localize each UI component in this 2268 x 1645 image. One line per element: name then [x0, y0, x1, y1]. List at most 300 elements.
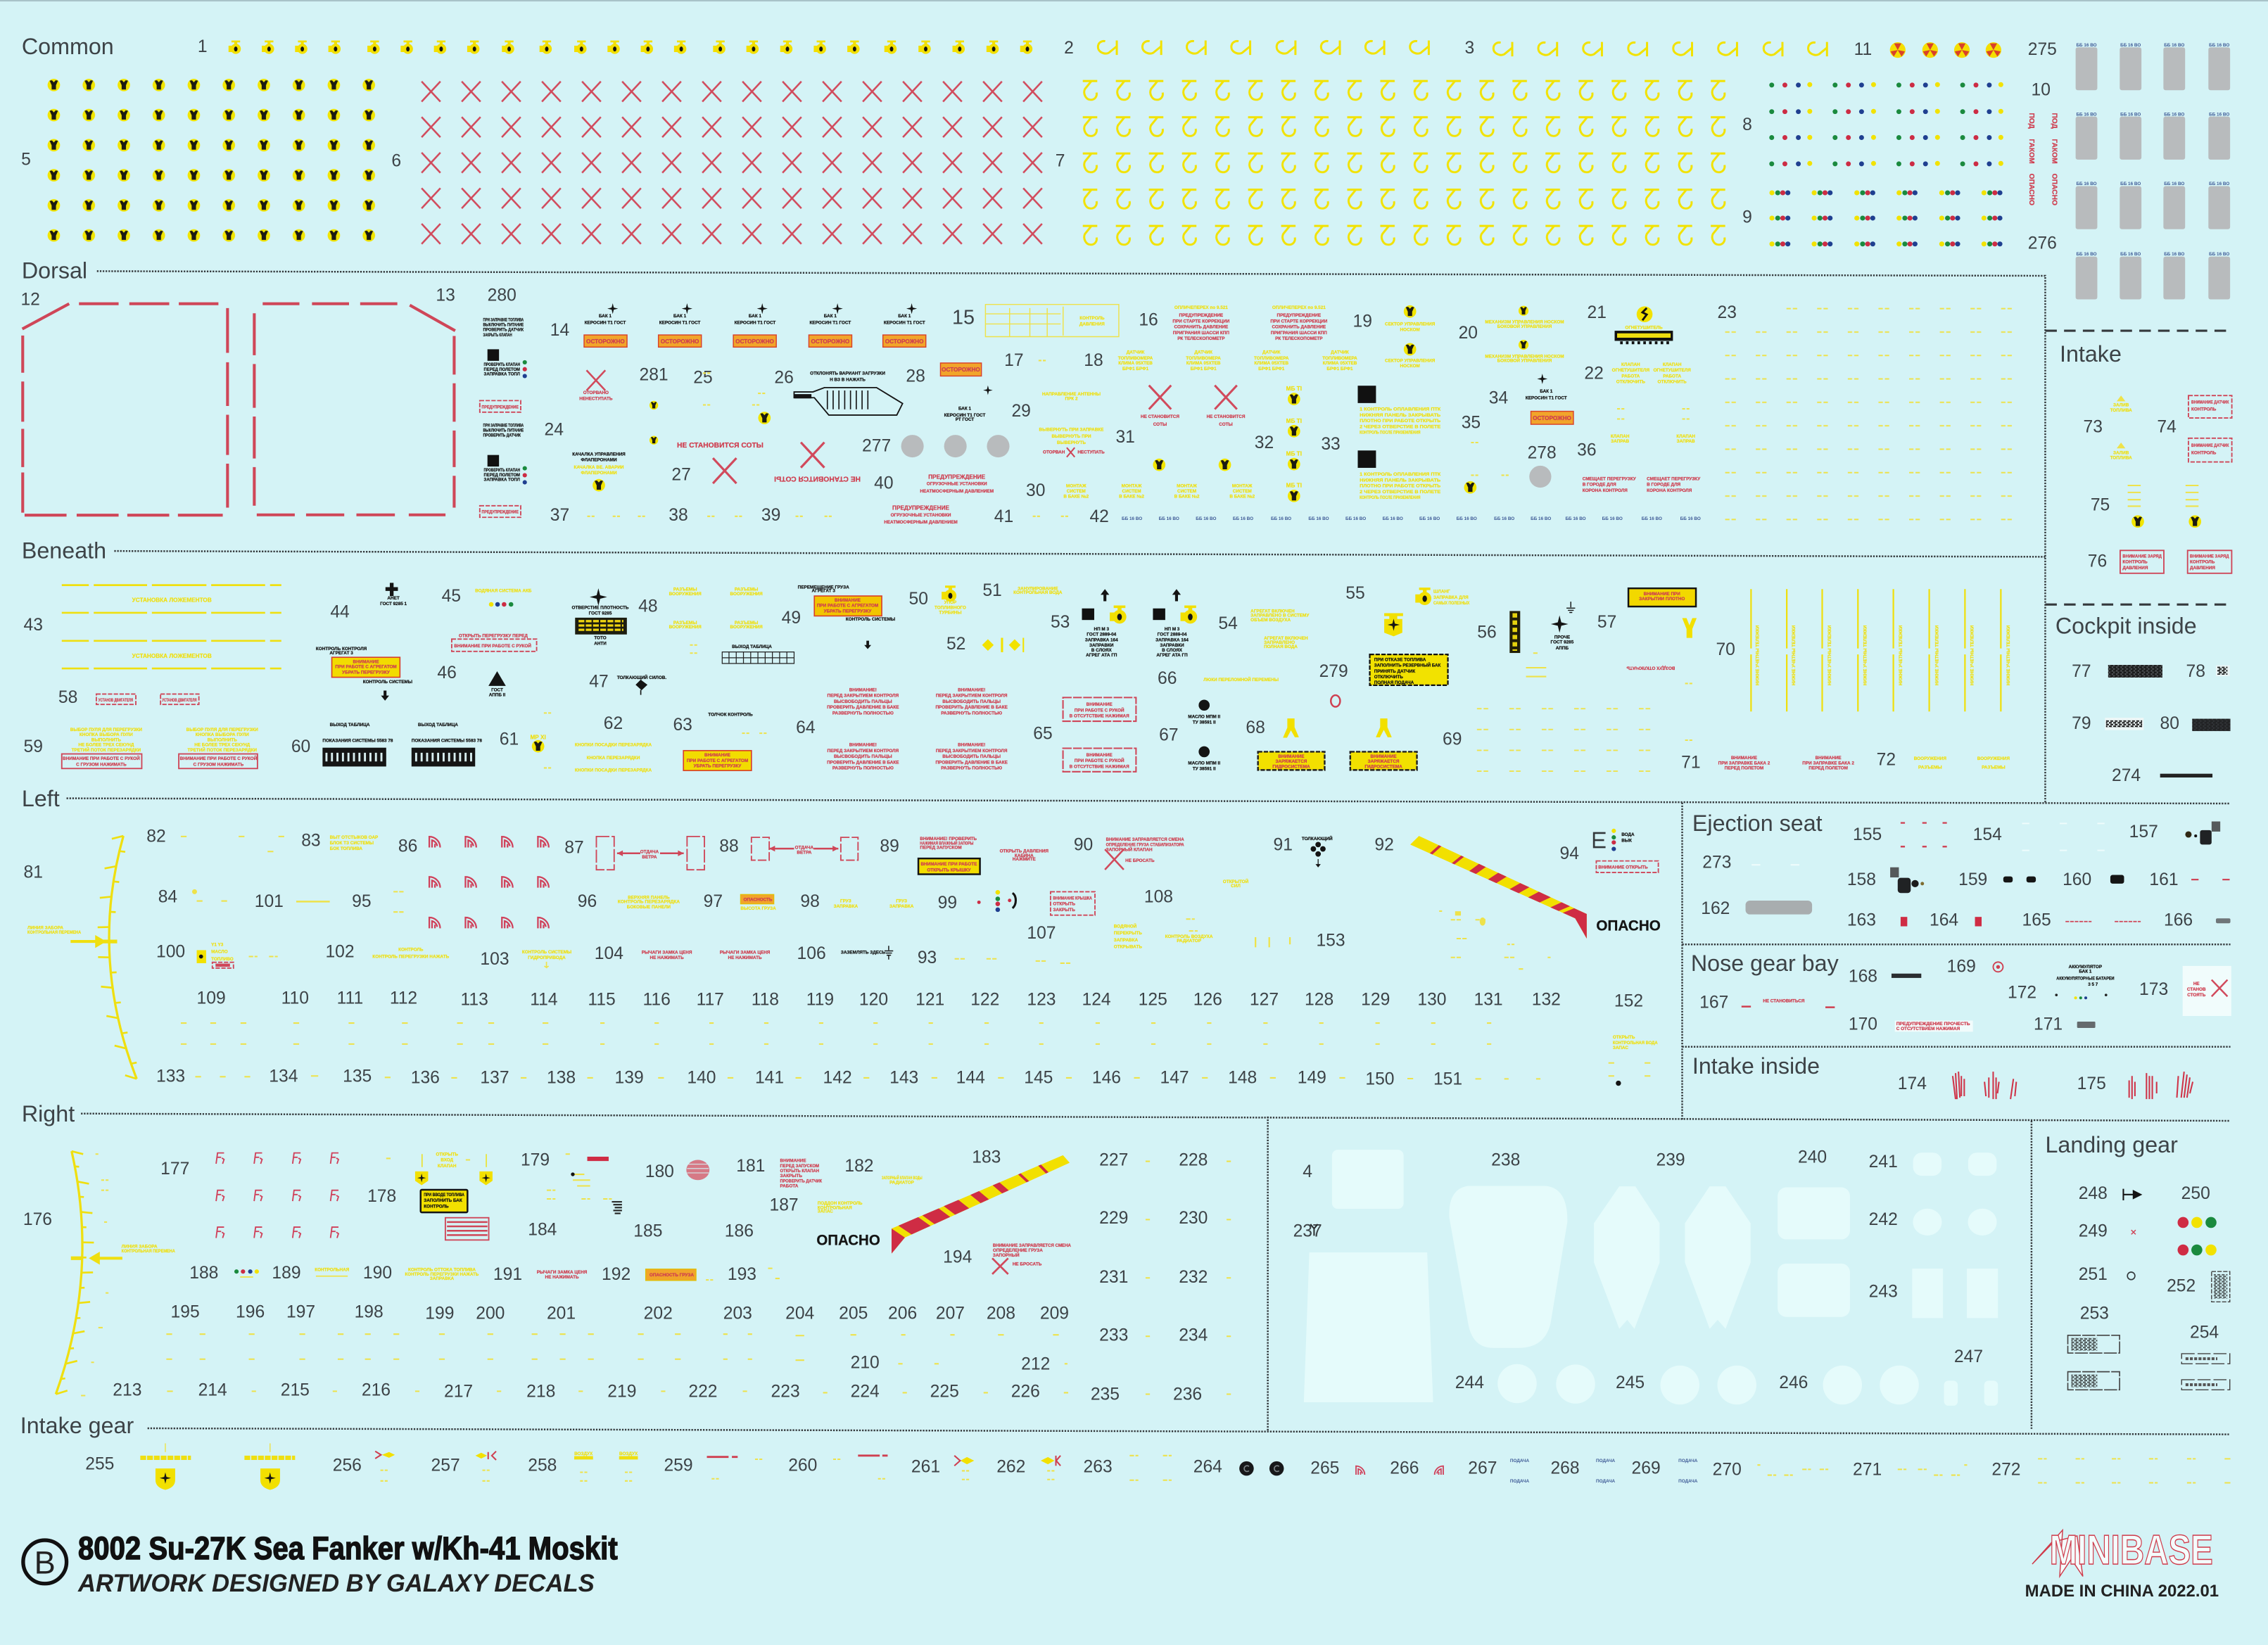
item 152: yellow text and black dot: ЗАПАС	[1613, 1046, 1628, 1050]
item numbers: landing gear	[2079, 1184, 2219, 1342]
item 59: yellow text with red boxes: С ГРУЗОМ НАЖИМАТЬ	[194, 762, 244, 767]
item 55: valves with cross and yellow panel: ЗАПРАВКА ДЛЯ	[1433, 595, 1469, 600]
item 83: yellow text: ВЫТ ОТСТЫКОВ ОАР	[330, 835, 379, 840]
item numbers: nose gear bay: 170	[1849, 1015, 1877, 1034]
item numbers: right: 196	[236, 1303, 265, 1322]
item 31: crosses and do not step text	[1141, 386, 1246, 471]
item 83: yellow text	[330, 835, 379, 851]
item numbers: common: 3	[1465, 39, 1474, 58]
item numbers: beneath: 65	[1033, 724, 1053, 743]
item 13: red dashed panel outline	[254, 304, 455, 515]
item 194: warning text and cross	[992, 1243, 1071, 1274]
item numbers: left: 140	[687, 1069, 716, 1088]
yellow weapons connectors text: РАЗЪЕМЫ	[673, 588, 697, 592]
item 94: E mark, dots and red box: ВОДА	[1621, 832, 1635, 837]
item 55: valves with cross and yellow panel: САМЫХ ПОЛЕЗНЫХ	[1433, 601, 1470, 606]
item 20: Y markers and text: БОКОВОЙ УПРАВЛЕНИЯ	[1497, 323, 1552, 329]
item 170: white strip with red text: С ОТСУТСТВИЕМ НАЖИМАЯ	[1896, 1027, 1960, 1031]
item 18: yellow fuel gauge text: КЛИМА 05ХТЕВ	[1186, 361, 1221, 366]
yellow weapons connectors text: РАЗЪЕМЫ	[735, 621, 758, 625]
item numbers: left: 143	[889, 1069, 918, 1088]
panel: cockpit inside	[2055, 613, 2231, 785]
item numbers: left: 111	[337, 989, 363, 1008]
item numbers: common	[21, 37, 2057, 253]
item numbers: ejection seat: 154	[1973, 825, 2002, 844]
item numbers: dorsal: 35	[1462, 413, 1481, 432]
item numbers: right: 232	[1179, 1268, 1208, 1287]
item 14: fuel placards with cross and orange label: БАК 1	[599, 314, 612, 319]
footer: product title: 8002 Su-27K Sea Fanker w/Kh-41 Moskit	[78, 1530, 618, 1566]
icon grid 5: yellow Y markers	[37, 70, 386, 250]
item 172: black text and dots: АККУМУЛЯТОР	[2069, 965, 2103, 970]
item 36: yellow and red text	[1583, 409, 1701, 493]
item 33: black squares with yellow text blocks: КОНТРОЛЬ ПОСЛЕ ПРИЗЕМЛЕНИЯ	[1360, 431, 1421, 436]
item numbers: nose gear bay: 167	[1699, 993, 1728, 1012]
item 54: yellow text	[1250, 609, 1310, 649]
item 102-104: text stencils: РЫЧАГИ ЗАМКА ЦЕНЯ	[720, 951, 771, 955]
item 81: yellow curved ruler with arrow	[27, 836, 137, 1079]
item numbers: left: 149	[1298, 1069, 1326, 1088]
item 32: MB-TI Y markers: МБ ТІ	[1286, 450, 1302, 457]
item 76: red lined boxes: ВНИМАНИЕ ЗАРЯД	[2190, 554, 2229, 559]
item 63: yellow warning label: ВНИМАНИЕ	[704, 753, 730, 758]
item numbers: dorsal: 277	[862, 436, 891, 455]
heading: Cockpit inside: Cockpit inside	[2055, 613, 2197, 638]
item numbers: nose gear bay: 172	[2008, 983, 2036, 1002]
item numbers: left: 142	[823, 1069, 852, 1088]
item 10: vertical red warning text: ГАКОМ	[2051, 139, 2058, 164]
item 44: cross, yellow warning label and arrow: ВНИМАНИЕ	[353, 659, 379, 664]
item 42: blue stencil row: ББ 16 ВО	[1159, 516, 1179, 521]
item numbers: intake: 73	[2084, 418, 2103, 437]
item numbers: left: 99	[938, 894, 957, 913]
item 53: arrows, squares, valves and black text: АГРЕГ АТА ГП	[1156, 653, 1188, 658]
item numbers: dorsal: 27	[671, 465, 691, 484]
item numbers: cockpit inside: 79	[2072, 714, 2091, 733]
item 67: oil filler markers: МАСЛО МПМ II	[1188, 761, 1220, 766]
item numbers: intake gear: 270	[1713, 1461, 1742, 1480]
item 49: warning label: КОНТРОЛЬ СИСТЕМЫ	[846, 617, 895, 622]
item 30: yellow installation text: В БАКЕ №2	[1063, 494, 1089, 499]
item 54: yellow text: ПОЛНАЯ ВОДА	[1264, 644, 1298, 649]
item 100: valve with small labels: ТОПЛИВО	[211, 957, 234, 962]
panel: ejection seat	[1692, 811, 2231, 930]
item numbers: right: 216	[362, 1381, 391, 1400]
item 18: yellow fuel gauge text: ДАТЧИК	[1331, 350, 1349, 355]
item 44: cross, yellow warning label and arrow: УБРАТЬ ПЕРЕГРУЗКУ	[342, 670, 391, 675]
item 23: yellow stencil grid	[1715, 297, 2022, 531]
item 62: yellow text: КНОПКА ПЕРЕЗАРЯДКИ	[587, 756, 640, 761]
item 36: yellow and red text: КОРОНА КОНТРОЛЯ	[1647, 488, 1692, 493]
item 42: blue stencil row: ББ 16 ВО	[1642, 516, 1662, 521]
item 16: red warning blocks: СОХРАНИТЬ ДАВЛЕНИЕ	[1272, 325, 1326, 330]
item 59: yellow text with red boxes: С ГРУЗОМ НАЖИМАТЬ	[76, 762, 127, 767]
item 20: Y markers and text	[1485, 306, 1564, 363]
item 65: red warning boxes: В ОТСУТСТВИЕ НАЖИМАЯ	[1070, 764, 1129, 769]
item 26: black line drawing of panel: Н ВЗ В НАЖАТЬ	[830, 378, 866, 383]
item 42: blue stencil row: ББ 16 ВО	[1565, 516, 1586, 521]
item numbers: intake gear: 259	[664, 1456, 693, 1475]
item numbers: dorsal: 16	[1139, 310, 1158, 329]
heading: Nose gear bay: Nose gear bay	[1691, 951, 1839, 976]
item numbers: common: 275	[2028, 40, 2057, 59]
item 254: grey data plates	[2181, 1354, 2230, 1390]
item 55: valves with cross and yellow panel: ПРИ ОТКАЗЕ ТОПЛИВА	[1374, 657, 1426, 662]
item 74: red dashed boxes: ВНИМАНИЕ ДАТЧИК	[2191, 443, 2229, 448]
item numbers: right: 204	[785, 1304, 814, 1323]
item 76: red lined boxes: КОНТРОЛЬ	[2190, 560, 2215, 565]
item 30: yellow installation text: В БАКЕ №2	[1229, 494, 1255, 499]
items 163-166: red and grey decals	[1901, 917, 2231, 927]
item 27: do not step marking: НЕ СТАНОВИТСЯ СОТЫ	[677, 442, 764, 450]
item numbers: left: 147	[1160, 1069, 1189, 1088]
item numbers: ejection seat: 157	[2129, 823, 2158, 841]
item 172: black text and dots	[2055, 965, 2115, 999]
item numbers: dorsal: 28	[906, 367, 925, 386]
item numbers: dorsal: 37	[550, 506, 569, 525]
item 55: valves with cross and yellow panel: ПРИНЯТЬ ДАТЧИК	[1374, 669, 1415, 674]
item 49: warning label: АГРЕГАТ 3	[812, 589, 835, 594]
item numbers: left: 148	[1228, 1069, 1257, 1088]
item numbers: right: 226	[1011, 1383, 1040, 1402]
item numbers: beneath: 51	[982, 581, 1002, 600]
item numbers: left: 119	[806, 991, 834, 1010]
item 40: warning text	[920, 474, 994, 494]
item 20: Y markers and text: МЕХАНИЗМ УПРАВЛЕНИЯ НОСКОМ	[1485, 355, 1564, 360]
item 102-104: text stencils	[372, 947, 771, 967]
item 280: black placards stack: ВЫКЛЮЧИТЬ ПИТАНИЕ	[483, 323, 524, 328]
item numbers: left: 96	[578, 892, 597, 911]
item 36: yellow and red text: КЛАПАН	[1676, 434, 1695, 439]
item 30: yellow installation text: МОНТАЖ	[1122, 484, 1142, 489]
item 69: yellow stencil grid	[1466, 698, 1661, 782]
item numbers: beneath: 47	[589, 672, 609, 691]
item 53: arrows, squares, valves and black text: ГОСТ 2889-04	[1087, 632, 1117, 637]
item 70: yellow vertical rails with text: НИЖНЕ УЧЕТНЫ ТЕЛЕЖКИ	[2006, 625, 2011, 685]
item 178: valves, black yellow label and red box: КЛАПАН	[438, 1164, 457, 1169]
item 44: cross, yellow warning label and arrow	[316, 583, 412, 701]
item 16: red warning blocks: ПРИ СТАРТЕ КОРРЕКЦИИ	[1270, 319, 1328, 324]
item 33: black squares with yellow text blocks: НИЖНЯЯ ПАНЕЛЬ ЗАКРЫВАТЬ	[1360, 413, 1441, 418]
items 60: black placards: ПОКАЗАНИЯ СИСТЕМЫ 5583 78	[412, 738, 482, 743]
item 18: yellow fuel gauge text: ДАТЧИК	[1262, 350, 1281, 355]
item numbers: dorsal: 17	[1004, 351, 1024, 370]
items 275-276: grey rectangles with blue codes: ББ 16 ВО	[2120, 112, 2141, 117]
item 76: red lined boxes	[2120, 550, 2231, 573]
item 178: valves, black yellow label and red box	[386, 1152, 493, 1240]
item 18: yellow fuel gauge text: БРФ1 БРФ1	[1191, 367, 1217, 371]
item 44: cross, yellow warning label and arrow: АГРЕГАТ 3	[329, 651, 353, 656]
item 37: flap control placard: КАЧАЛКА УПРАВЛЕНИЯ	[572, 452, 626, 457]
item 92: yellow and red warning band	[1410, 836, 1587, 939]
item numbers: dorsal: 25	[693, 369, 713, 388]
items 108 and 153: yellow small stencils: ОТКРЫТОЙ	[1223, 878, 1249, 884]
heading: Left: Left	[22, 786, 60, 811]
item 96-98: yellow texts and label: ЗАПРАВКА	[834, 904, 858, 909]
item numbers: dorsal: 13	[436, 286, 455, 305]
item numbers: ejection seat: 273	[1702, 853, 1731, 872]
item numbers: landing gear: 254	[2190, 1323, 2219, 1342]
yellow weapons connectors text: ВООРУЖЕНИЯ	[730, 592, 763, 597]
item 90: warning text with cross	[1105, 837, 1184, 870]
item 42: blue stencil row: ББ 16 ВО	[1233, 516, 1253, 521]
item numbers: left: 90	[1074, 836, 1093, 855]
item 96-98: yellow texts and label: ГРУЗ	[840, 899, 851, 904]
item numbers: left: 95	[352, 892, 372, 911]
item 31: crosses and do not step text: НЕ СТАНОВИТСЯ	[1207, 414, 1246, 419]
item 33: black squares with yellow text blocks: ПЛОТНО ПРИ РАБОТЕ ОТКРЫТЬ	[1360, 484, 1441, 489]
item 37: flap control placard	[572, 452, 626, 491]
item 29: cross and fuel text: КЕРОСИН Т1 ГОСТ	[944, 413, 985, 418]
item 279: red ring	[1331, 695, 1340, 707]
item numbers: right: 198	[355, 1303, 384, 1322]
item 44: cross, yellow warning label and arrow: КОНТРОЛЬ КОНТРОЛЯ	[316, 647, 367, 652]
item 55: valves with cross and yellow panel	[1370, 588, 1470, 685]
item 76: red lined boxes: ВНИМАНИЕ ЗАРЯД	[2122, 554, 2162, 559]
item numbers: left: 150	[1365, 1070, 1395, 1089]
item 182 and 187: yellow text: ЗАПАС	[818, 1209, 833, 1214]
item 29b: antenna text and small X: ВЫВЕРНУТЬ ПРИ	[1051, 434, 1091, 439]
item numbers: cockpit inside: 80	[2160, 714, 2179, 733]
item numbers: beneath: 48	[638, 597, 658, 616]
item 48: star and black-yellow label	[572, 588, 629, 647]
item 22: yellow text: ОГНЕТУШИТЕЛЯ	[1612, 368, 1649, 373]
yellow weapons connectors text: ВООРУЖЕНИЯ	[669, 592, 702, 597]
item 30: yellow installation text: МОНТАЖ	[1232, 484, 1253, 489]
item numbers: left: 100	[156, 943, 185, 962]
item numbers: right: 193	[728, 1265, 756, 1284]
item 21: zigzag icon and fire extinguisher strip: ОГНЕТУШИТЕЛЬ	[1625, 326, 1663, 331]
item numbers: right: 223	[771, 1383, 800, 1402]
item 71: red small text: ПЕРЕД ПОЛЕТОМ	[1808, 766, 1848, 771]
item 175: red streaks	[2129, 1072, 2193, 1099]
item 67: oil filler markers	[1188, 699, 1220, 772]
item numbers: left: 117	[697, 991, 724, 1010]
item 89: warning texts and yellow label: ОТКРЫТЬ ДАВЛЕНИЯ	[1000, 849, 1049, 854]
item numbers: common: 276	[2028, 234, 2057, 253]
item 178: valves, black yellow label and red box: ПРИ ВВОДЕ ТОПЛИВА	[424, 1193, 464, 1198]
number labels: masks: 246	[1779, 1373, 1808, 1392]
item 29b: antenna text and small X: НЕСТУПАТЬ	[1077, 450, 1105, 455]
item numbers: left: 107	[1027, 924, 1056, 943]
item 40: warning text: ОГРУЗОЧНЫЕ УСТАНОВКИ	[927, 482, 987, 487]
item numbers: nose gear bay: 173	[2139, 980, 2168, 999]
item 33: black squares with yellow text blocks: 1 КОНТРОЛЬ ОПЛАВЛЕНИЯ ПТК	[1360, 472, 1440, 477]
item 14: fuel placards with cross and orange label: КЕРОСИН Т1 ГОСТ	[585, 320, 626, 325]
item numbers: right: 224	[851, 1383, 880, 1402]
item numbers: right: 225	[930, 1383, 959, 1402]
icon grid 6: red crosses	[411, 74, 1053, 252]
item 30: yellow installation text: СИСТЕМ	[1122, 489, 1141, 494]
item 96-98: yellow texts and label: ОПАСНОСТЬ	[744, 898, 773, 903]
item numbers: intake: 76	[2088, 552, 2107, 571]
item 280: black placards stack	[480, 317, 527, 517]
item 100: valve with small labels	[197, 942, 278, 968]
items 275-276: grey rectangles with blue codes: ББ 16 ВО	[2209, 43, 2229, 48]
item 57: star, ground mark and yellow box: ГОСТ 9285	[1551, 640, 1574, 645]
item numbers: beneath: 58	[58, 688, 77, 707]
item 64: red warning text blocks	[827, 688, 1008, 771]
item 59: yellow text with red boxes: НЕ БОЛЕЕ ТРЕХ СЕКУНД	[78, 743, 134, 748]
item 30: yellow installation text: СИСТЕМ	[1233, 489, 1252, 494]
item numbers: intake gear: 269	[1632, 1459, 1661, 1478]
item 22: yellow text	[1612, 362, 1691, 385]
item 75: yellow stencils and Y markers	[2128, 485, 2201, 528]
item numbers: right: 227	[1099, 1151, 1128, 1170]
item numbers: dorsal: 33	[1321, 435, 1341, 454]
item numbers: beneath: 44	[330, 603, 350, 622]
items 108 and 153: yellow small stencils: ОТКРЫВАТЬ	[1114, 944, 1142, 949]
item 70: yellow vertical rails with text: НИЖНЕ УЧЕТНЫ ТЕЛЕЖКИ	[1827, 625, 1832, 685]
item 65: red warning boxes: ВНИМАНИЕ	[1087, 753, 1113, 758]
item 181: red text block: ПРОВЕРИТЬ ДАТЧИК	[780, 1179, 822, 1183]
item 73: yellow triangle stencils: ЗАЛИВ	[2113, 403, 2129, 408]
item numbers: beneath: 55	[1345, 584, 1365, 603]
item 181: red text block	[780, 1159, 822, 1189]
item 64: red warning text blocks: ПЕРЕД ЗАКРЫТИЕМ КОНТРОЛЯ	[828, 694, 899, 699]
items 275-276: grey rectangles with blue codes: ББ 16 ВО	[2120, 182, 2141, 186]
item 46: black triangle: АППБ II	[489, 693, 505, 698]
item 183: yellow and red warning band	[892, 1155, 1070, 1254]
item numbers: dorsal: 38	[669, 506, 688, 525]
item 96-98: yellow texts and label: ГРУЗ	[896, 899, 907, 904]
item 54: yellow text: ЗАПРАВЛЕНО	[1264, 640, 1295, 645]
items 188-193: text, dots and orange label: НЕ НАЖИМАТЬ	[545, 1275, 579, 1280]
item numbers: right: 176	[23, 1210, 52, 1229]
item numbers: left: 83	[301, 831, 321, 850]
item 64: red warning text blocks: РАЗВЕРНУТЬ ПОЛНОСТЬЮ	[941, 766, 1003, 771]
item 239: white leaf masks	[1594, 1186, 1751, 1329]
logo: MINIBASE	[2032, 1526, 2213, 1576]
item 37: flap control placard: ФЛАПЕРОНАМИ	[581, 458, 617, 463]
item numbers: right: 197	[286, 1303, 315, 1322]
item 280: black placards stack: ПРОВЕРИТЬ ДАТЧИК	[483, 328, 524, 333]
item numbers: left: 102	[325, 943, 355, 962]
item 53: arrows, squares, valves and black text: В СЛОЯХ	[1162, 648, 1183, 653]
item 50: valve with yellow text: ТУРБИНЫ	[939, 611, 961, 616]
item 47: black icon	[617, 674, 666, 695]
items 275-276: grey rectangles with blue codes: ББ 16 ВО	[2120, 252, 2141, 257]
item numbers: left: 98	[800, 892, 820, 911]
item 36: yellow and red text: В ГОРОДЕ ДЛЯ	[1583, 483, 1616, 488]
item 29b: antenna text and small X: ОТОРВАН	[1043, 450, 1065, 455]
footer: sheet letter badge: B	[34, 1544, 56, 1580]
item 53: arrows, squares, valves and black text	[1082, 589, 1197, 658]
item 64: red warning text blocks: ВНИМАНИЕ!	[849, 688, 877, 693]
item numbers: intake gear: 258	[528, 1456, 557, 1475]
item 181: red text block: РАБОТА	[780, 1184, 799, 1189]
item 43: yellow lines and lodgement text	[62, 585, 281, 668]
item numbers: cockpit inside: 274	[2112, 766, 2141, 785]
item 22: yellow text: ОТКЛЮЧИТЬ	[1658, 380, 1687, 385]
item 248: black arrow icon	[2123, 1189, 2141, 1200]
item numbers: intake gear: 272	[1991, 1461, 2021, 1480]
item numbers: right: 212	[1021, 1355, 1050, 1374]
items 275-276: grey rectangles with blue codes: ББ 16 ВО	[2164, 112, 2184, 117]
items 108 and 153: yellow small stencils: РАДИАТОР	[1177, 939, 1202, 944]
item numbers: dorsal: 280	[488, 286, 517, 305]
item numbers: intake gear: 260	[788, 1456, 817, 1475]
item 55: valves with cross and yellow panel: ЗАПОЛНИТЬ РЕЗЕРВНЫЙ БАК	[1374, 662, 1440, 668]
item numbers: left: 129	[1361, 991, 1390, 1010]
items 275-276: grey rectangles with blue codes: ББ 16 ВО	[2076, 252, 2097, 257]
heading: Intake inside: Intake inside	[1692, 1053, 1820, 1079]
items 267-269: blue stencils: ПОДАЧА	[1678, 1459, 1698, 1463]
item 59: yellow text with red boxes: НЕ БОЛЕЕ ТРЕХ СЕКУНД	[194, 743, 251, 748]
item 61: MP-XI Y marker: МР ХI	[530, 734, 546, 740]
item numbers: right: 202	[644, 1304, 673, 1323]
panel: dorsal	[20, 258, 2022, 531]
item 64: red warning text blocks: ПЕРЕД ЗАКРЫТИЕМ КОНТРОЛЯ	[936, 694, 1008, 699]
item numbers: left: 135	[343, 1067, 372, 1086]
items 154 and 273: faint white marks	[1751, 823, 2105, 865]
item 58: red dashed labels	[96, 694, 199, 704]
item 107: red dashed box: ОТКРЫТЬ	[1053, 902, 1075, 907]
item numbers: right: 194	[943, 1247, 972, 1266]
item 64: red warning text blocks: ВЫСВОБОДИТЬ ПАЛЬЦЫ	[834, 699, 892, 704]
items 188-193: text, dots and orange label: КОНТРОЛЬНАЯ	[315, 1268, 350, 1273]
item 242: white ellipse masks	[1913, 1209, 1997, 1236]
item numbers: right: 229	[1099, 1209, 1128, 1228]
item 45: dots and red box: ВОДЯНАЯ СИСТЕМА АКБ	[475, 589, 532, 594]
item 89: warning texts and yellow label: НАЖИМАЯ ВЛАЖНЫЙ ЗАПОРЫ	[920, 839, 973, 846]
item numbers: right: 184	[528, 1220, 557, 1239]
item 53: arrows, squares, valves and black text: НП М 3	[1094, 627, 1109, 632]
item 74: red dashed boxes: КОНТРОЛЬ	[2191, 450, 2217, 455]
item 70: yellow vertical rails with text: НИЖНЕ УЧЕТНЫ ТЕЛЕЖКИ	[1792, 625, 1797, 685]
item 57: star, ground mark and yellow box: ВНИМАНИЕ ПРИ	[1644, 592, 1680, 597]
heading: Dorsal: Dorsal	[22, 258, 87, 284]
item 14: fuel placards with cross and orange label: ОСТОРОЖНО	[661, 338, 699, 345]
item numbers: beneath	[24, 581, 1896, 772]
item 64: red warning text blocks: ВНИМАНИЕ!	[958, 743, 985, 748]
item numbers: left: 109	[197, 989, 226, 1008]
item numbers: left: 133	[156, 1067, 185, 1086]
items 275-276: grey rectangles with blue codes: ББ 16 ВО	[2076, 112, 2097, 117]
item 74: red dashed boxes: ВНИМАНИЕ ДАТЧИК	[2191, 400, 2229, 405]
item 16: red warning blocks: СОХРАНИТЬ ДАВЛЕНИЕ	[1174, 325, 1228, 330]
item 36: yellow and red text: КОРОНА КОНТРОЛЯ	[1583, 488, 1628, 493]
item numbers: left: 84	[158, 888, 177, 907]
item 16: red warning blocks: ОПЛИЧЕПЕРЕХ по 9.521	[1272, 305, 1326, 310]
item numbers: left: 89	[880, 837, 899, 856]
item 28: orange label: ОСТОРОЖНО	[942, 367, 980, 373]
item 56: yellow black strip	[1509, 611, 1520, 653]
item numbers: dorsal: 30	[1026, 481, 1045, 500]
item 82-84: small yellow stencils	[181, 837, 1540, 1079]
item 10: vertical red warning text: ОПАСНО	[2051, 174, 2058, 205]
item numbers: intake gear: 262	[996, 1457, 1025, 1476]
items 108 and 153: yellow small stencils: КОНТРОЛЬ ВОЗДУХА	[1165, 934, 1213, 939]
item 16: red warning blocks: ПРИГРАНИЯ ШАССИ КПП	[1173, 331, 1229, 336]
item 42: blue stencil row: ББ 16 ВО	[1383, 516, 1403, 521]
item 71: red small text: ПРИ ЗАПРАВКЕ БАКА 2	[1718, 761, 1770, 766]
item 33: black squares with yellow text blocks: 2 ЧЕРЕЗ ОТВЕРСТИЕ В ПОЛЕТЕ	[1360, 490, 1440, 495]
item 90: warning text with cross: НЕ БРОСАТЬ	[1125, 858, 1155, 863]
item 54: yellow text: АГРЕГАТ ВКЛЮЧЕН	[1250, 609, 1295, 614]
item numbers: ejection seat: 160	[2063, 870, 2091, 889]
item 152: yellow text and black dot	[1609, 1035, 1658, 1086]
item 62: yellow text	[575, 743, 652, 773]
item numbers: landing gear: 250	[2181, 1184, 2210, 1203]
item 258: yellow text	[574, 1452, 638, 1481]
item numbers: left: 130	[1417, 991, 1446, 1010]
items 275-276: grey rectangles with blue codes: ББ 16 ВО	[2164, 182, 2184, 186]
item 36: yellow and red text: СМЕЩАЕТ ПЕРЕГРУЗКУ	[1647, 476, 1701, 481]
item numbers: left: 114	[530, 991, 558, 1010]
item 22: yellow text: РАБОТА	[1621, 374, 1640, 379]
items 275-276: grey rectangles with blue codes: ББ 16 ВО	[2120, 43, 2141, 48]
